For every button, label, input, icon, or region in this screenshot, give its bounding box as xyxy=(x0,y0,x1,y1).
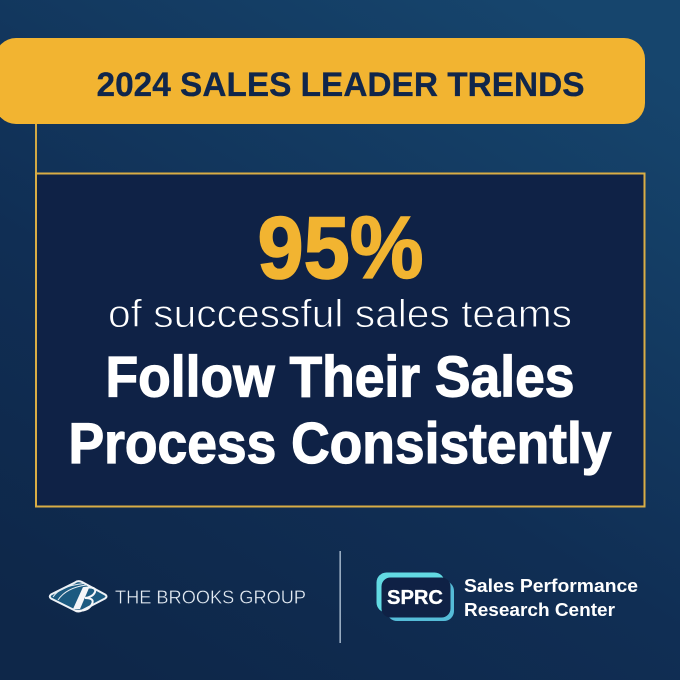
panel: main statistic xyxy=(36,174,644,506)
statistic 95%: 95% xyxy=(258,198,424,297)
wordmark: THE BROOKS GROUP xyxy=(115,586,306,608)
icon: diamond B xyxy=(50,581,106,612)
banner xyxy=(0,38,645,124)
logo: SPRC xyxy=(376,572,638,621)
banner heading: 2024 SALES LEADER TRENDS xyxy=(96,66,584,104)
logo: The Brooks Group xyxy=(50,581,306,612)
logo: SPRC: Research Center xyxy=(464,599,615,620)
icon: SPRC badge: SPRC xyxy=(387,586,443,609)
divider xyxy=(340,551,341,643)
headline line 2: Process Consistently xyxy=(68,412,612,476)
subheading: of successful sales teams xyxy=(108,293,572,336)
headline line 1: Follow Their Sales xyxy=(106,346,574,410)
organisation name: Sales Performance xyxy=(464,575,638,596)
connector line xyxy=(35,124,37,174)
icon: SPRC badge xyxy=(376,572,454,621)
